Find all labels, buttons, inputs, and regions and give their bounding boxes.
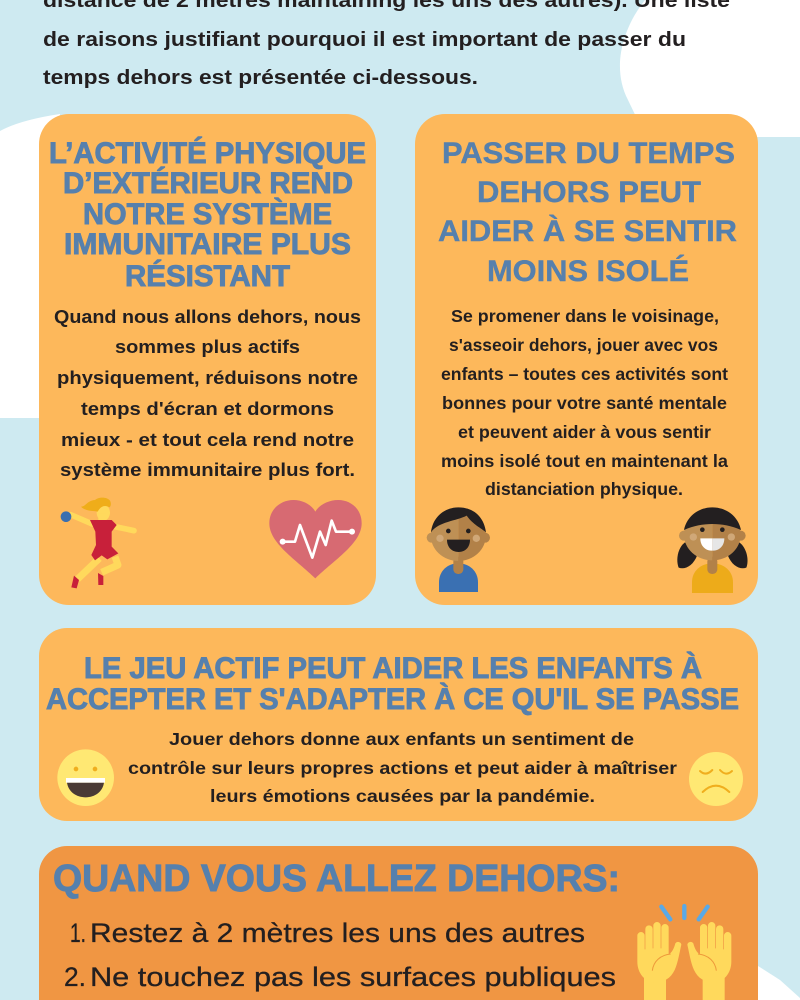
icon: smiling girl <box>677 507 748 593</box>
heading: immune system: NOTRE SYSTÈME <box>83 197 332 231</box>
body text: feeling less isolated: et peuvent aider à vous sentir <box>458 422 711 442</box>
body text: active play: leurs émotions causées par la pandémie. <box>210 786 595 806</box>
body text: immune system: système immunitaire plus fort. <box>60 460 355 480</box>
body text: feeling less isolated: s'asseoir dehors, jouer avec vos <box>449 335 718 355</box>
heading: feeling less isolated <box>438 137 737 288</box>
heading: active play: LE JEU ACTIF PEUT AIDER LES ENFANTS À <box>84 651 702 685</box>
icon: happy face <box>57 749 114 806</box>
body text: feeling less isolated: Se promener dans le voisinage, <box>451 306 719 326</box>
body text: active play <box>128 729 677 806</box>
heading: immune system <box>49 136 366 293</box>
body text: active play: contrôle sur leurs propres actions et peut aider à maîtriser <box>128 758 677 778</box>
body text: immune system: mieux - et tout cela rend notre <box>61 430 354 450</box>
body text: feeling less isolated: moins isolé tout en maintenant la <box>441 451 728 471</box>
heading: immune system: D’EXTÉRIEUR REND <box>63 166 353 200</box>
intro text block <box>43 0 730 89</box>
heading: when you go outside: QUAND VOUS ALLEZ DEHORS: <box>53 858 620 900</box>
heading: immune system: RÉSISTANT <box>125 259 290 293</box>
intro text block: de raisons justifiant pourquoi il est important de passer du <box>43 29 686 51</box>
icon: girl throwing ball <box>61 498 134 588</box>
body text: feeling less isolated <box>441 306 728 499</box>
list: first rule: 1. <box>70 918 86 948</box>
heading: feeling less isolated: DEHORS PEUT <box>477 176 701 209</box>
heading: active play: ACCEPTER ET S'ADAPTER À CE QU'IL SE PASSE <box>46 682 739 716</box>
heading: feeling less isolated: PASSER DU TEMPS <box>442 137 735 170</box>
body text: immune system: Quand nous allons dehors, nous <box>54 307 361 327</box>
panel: when you go outside <box>39 846 758 1000</box>
heading: feeling less isolated: AIDER À SE SENTIR <box>438 214 737 248</box>
heading: feeling less isolated: MOINS ISOLÉ <box>487 254 689 288</box>
panel: active play <box>39 628 758 821</box>
icon: raised hands <box>637 906 731 1000</box>
intro text block: temps dehors est présentée ci-dessous. <box>43 67 478 89</box>
body text: feeling less isolated: enfants – toutes ces activités sont <box>441 364 728 384</box>
body text: active play: Jouer dehors donne aux enfants un sentiment de <box>169 729 634 749</box>
heading: active play <box>46 651 739 716</box>
icon: sad face <box>689 752 743 806</box>
body text: immune system: physiquement, réduisons notre <box>57 368 358 388</box>
list: first rule: Restez à 2 mètres les uns des autres <box>90 918 585 948</box>
body text: feeling less isolated: bonnes pour votre santé mentale <box>442 393 727 413</box>
body text: feeling less isolated: distanciation physique. <box>485 479 683 499</box>
list: second rule: 2. <box>64 962 86 992</box>
heading: immune system: IMMUNITAIRE PLUS <box>64 228 351 261</box>
list: second rule: Ne touchez pas les surfaces publiques <box>90 962 616 992</box>
panel: immune system <box>39 114 376 605</box>
heading: immune system: L’ACTIVITÉ PHYSIQUE <box>49 136 366 170</box>
panel: feeling less isolated <box>415 114 758 605</box>
icon: heart with pulse <box>269 500 362 578</box>
body text: immune system: sommes plus actifs <box>115 337 300 357</box>
body text: immune system: temps d'écran et dormons <box>81 399 334 419</box>
body text: immune system <box>54 307 361 480</box>
icon: smiling boy <box>427 507 490 592</box>
